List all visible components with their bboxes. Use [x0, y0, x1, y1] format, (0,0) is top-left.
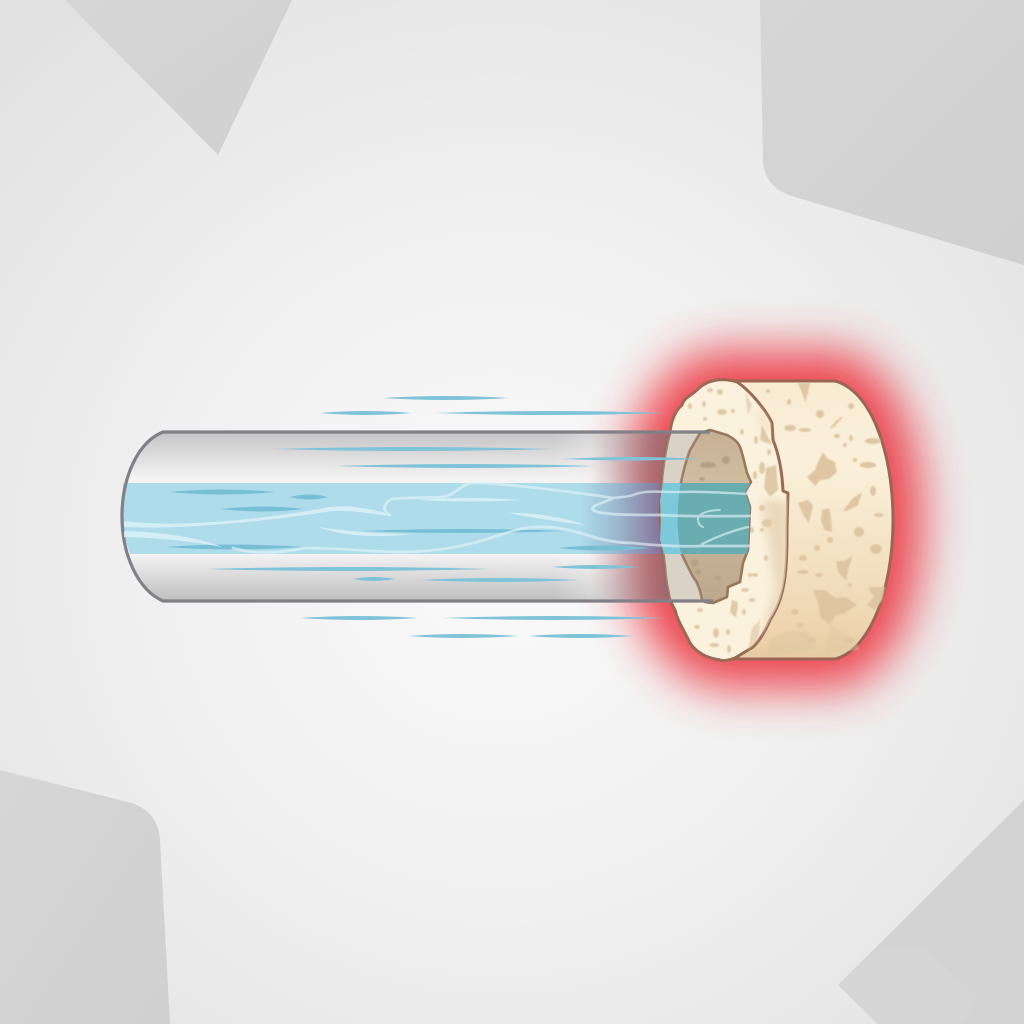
dashes below tube — [300, 616, 418, 620]
tube fill — [122, 432, 685, 601]
side speckles — [766, 383, 885, 655]
ring speckles — [688, 388, 778, 653]
lumen opening — [678, 430, 751, 603]
tube darkening near blockage — [590, 432, 685, 601]
dashes on tube bottom — [205, 567, 492, 571]
corner shape: bottom left — [0, 770, 170, 1024]
flow dashes in and around tube — [205, 396, 702, 638]
dashes above tube — [383, 396, 510, 400]
cork blockage — [660, 380, 893, 661]
corner shape: bottom right — [838, 800, 1024, 1024]
water in lumen — [676, 483, 752, 554]
lumen speckles — [691, 456, 730, 580]
water streaks — [124, 483, 750, 553]
tube outline — [122, 432, 713, 601]
dashes on tube top — [273, 447, 552, 451]
corner shape: top right — [760, 0, 1024, 265]
line streaks — [233, 483, 750, 553]
filled tapered streaks — [124, 498, 586, 547]
red inflammation glow — [650, 380, 893, 659]
flow dashes inside water — [165, 490, 650, 550]
water band — [122, 483, 580, 554]
water band fading over glow — [580, 483, 675, 554]
cork outer side — [732, 381, 893, 659]
glass tube body — [122, 432, 685, 601]
ring rim shading — [758, 400, 790, 640]
water over ring strip — [660, 483, 684, 554]
corner shape: top left — [65, 0, 292, 155]
glass strip over ring — [660, 433, 702, 600]
cork front ring face — [660, 380, 788, 661]
